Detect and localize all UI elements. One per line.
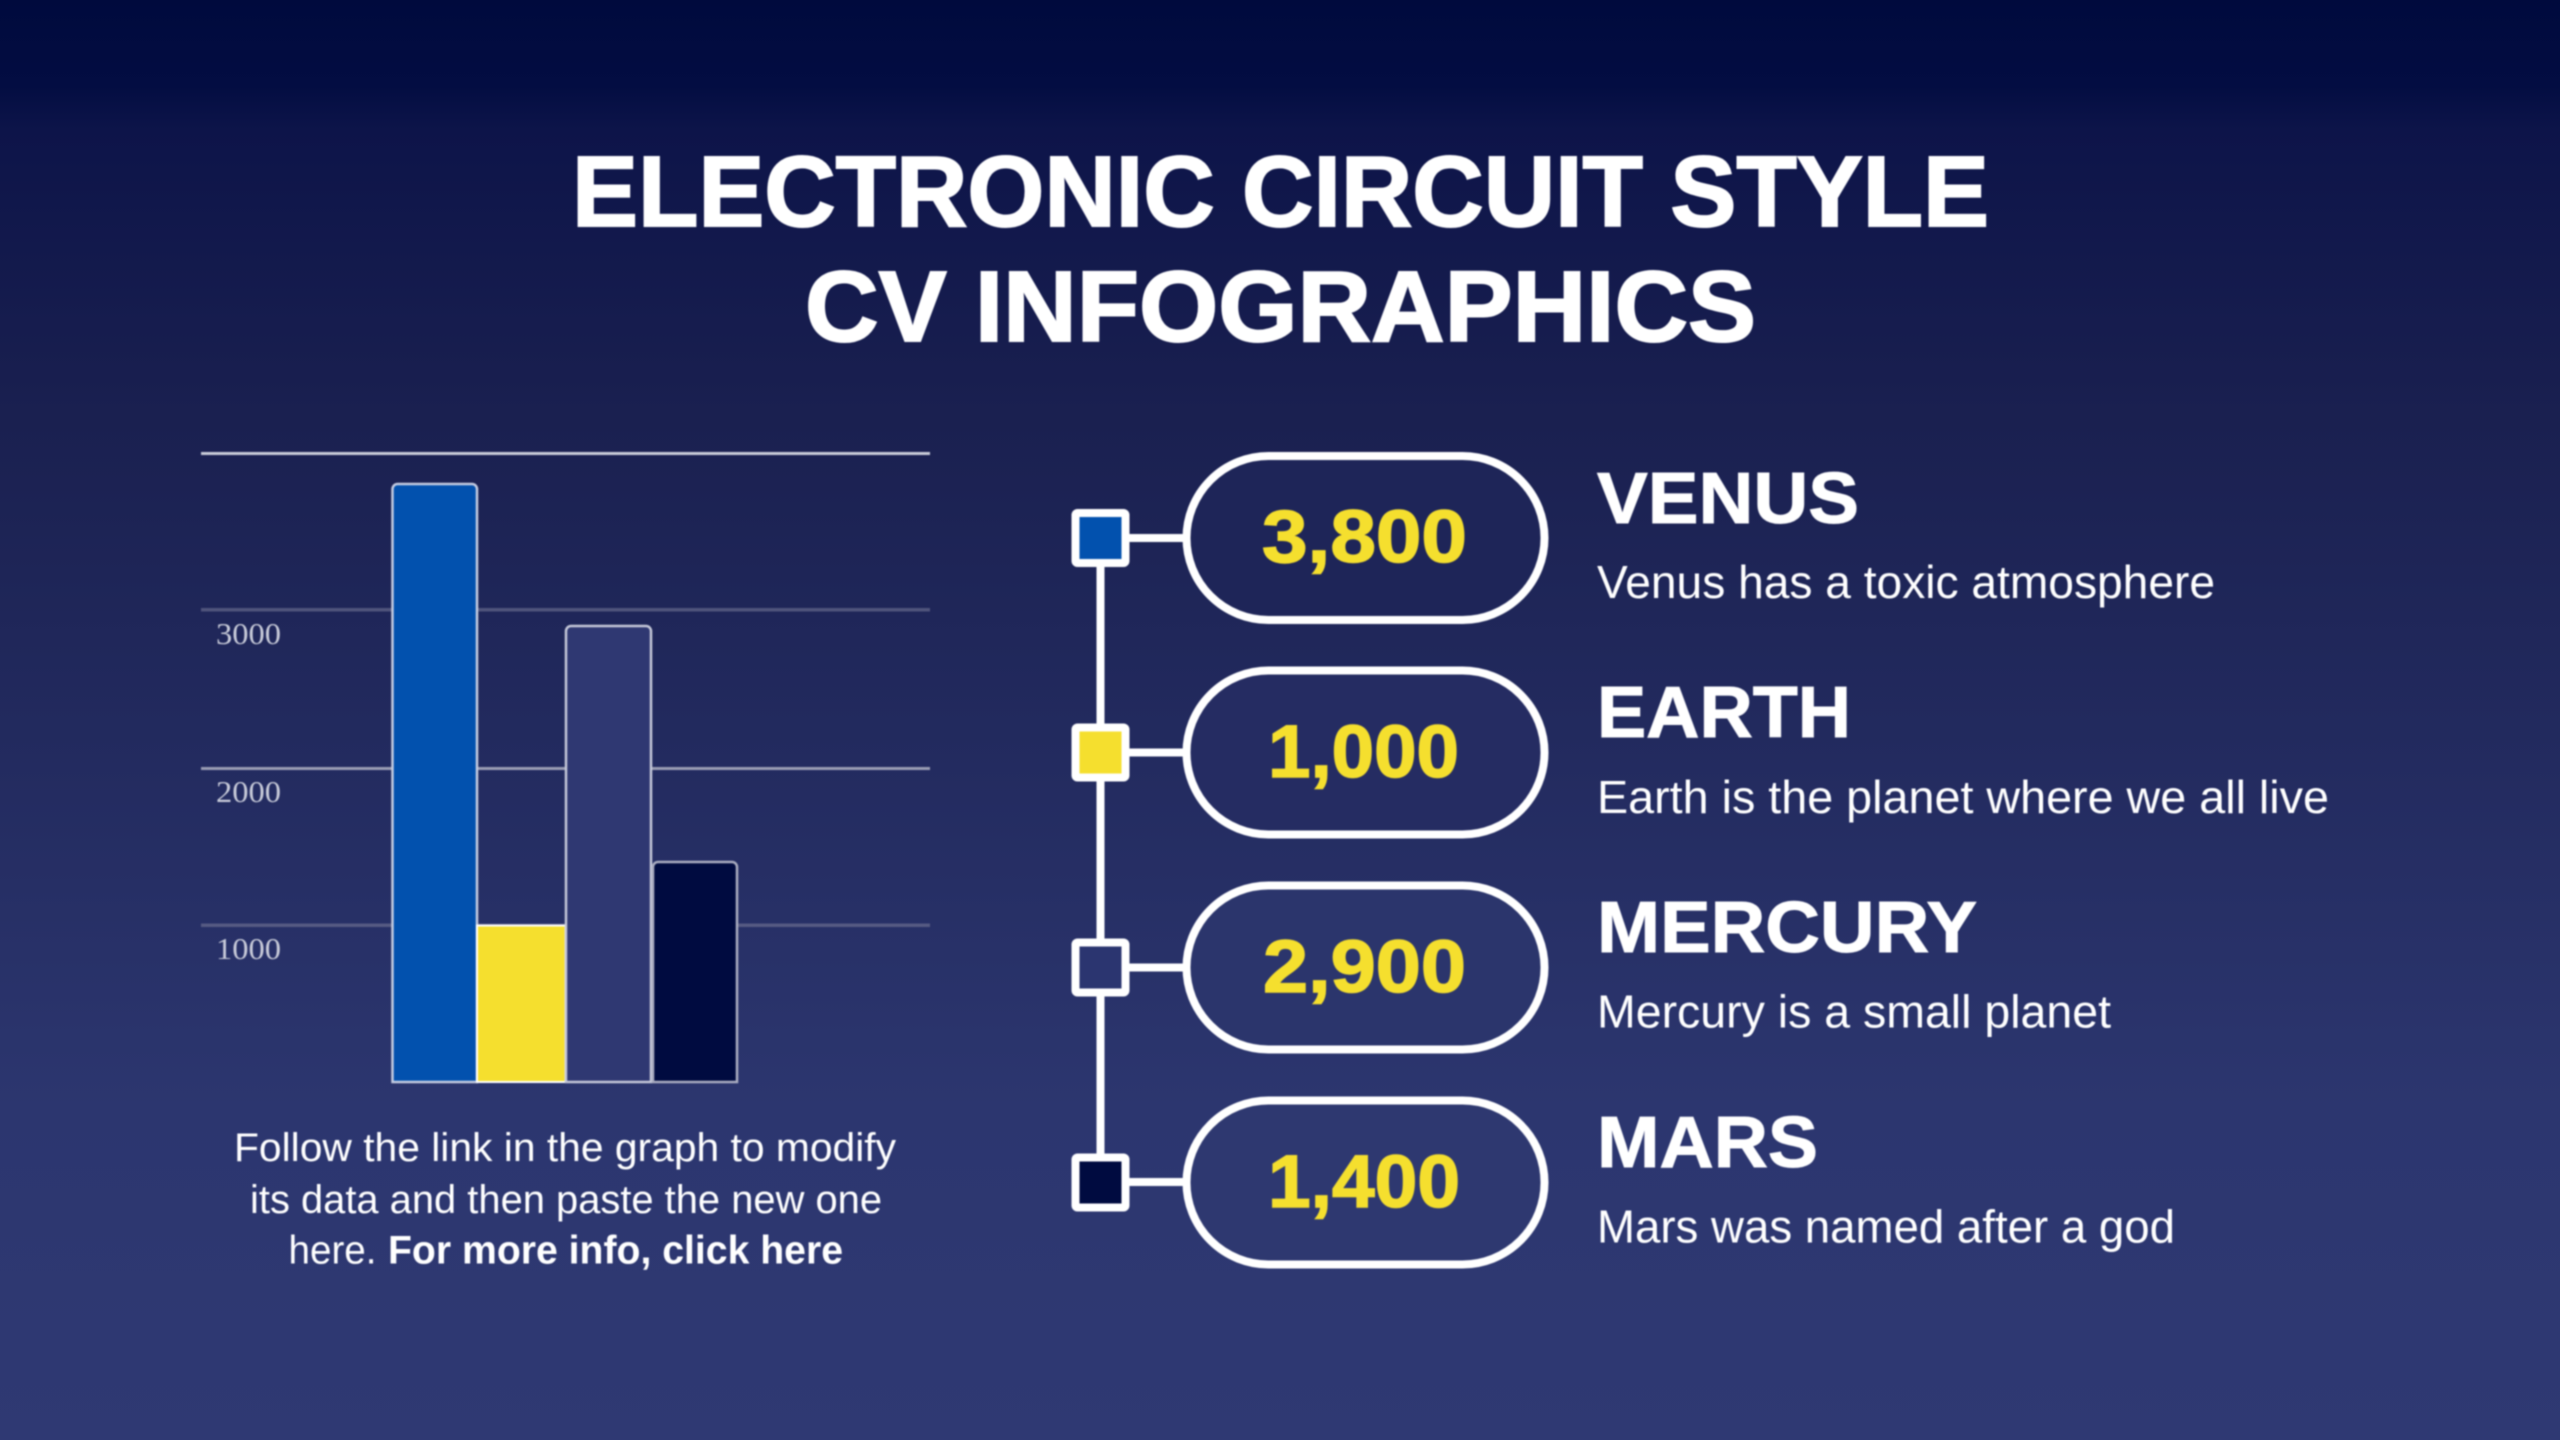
bar: Mars 1400 <box>653 862 737 1082</box>
chart caption: Follow the link in the graph to modify <box>234 1126 896 1170</box>
value pill <box>1186 456 1544 620</box>
heading: EARTH <box>1597 673 1851 753</box>
y axis labels: 3000 <box>216 616 281 651</box>
bar: Venus 3800 <box>392 484 477 1082</box>
item: Mercury <box>1076 886 2111 1050</box>
chart caption: here. <box>288 1228 376 1272</box>
description: Venus has a toxic atmosphere <box>1597 556 2215 608</box>
chart gridlines <box>201 452 930 927</box>
infographic content <box>201 136 2329 1272</box>
title: CV INFOGRAPHICS <box>805 251 1756 363</box>
bar chart <box>201 452 930 1082</box>
item: Venus <box>1076 456 2215 620</box>
value: 1,400 <box>1268 1140 1460 1223</box>
chart caption: For more info, click here <box>388 1228 843 1272</box>
title: ELECTRONIC CIRCUIT STYLE <box>572 136 1989 248</box>
node square: navy <box>1076 1158 1126 1208</box>
heading: VENUS <box>1597 459 1859 539</box>
value: 2,900 <box>1263 925 1466 1008</box>
node square: yellow <box>1076 728 1126 778</box>
value pill <box>1186 1100 1544 1264</box>
node square: blue <box>1076 513 1126 563</box>
value: 3,800 <box>1262 495 1467 578</box>
description: Mercury is a small planet <box>1597 986 2111 1038</box>
y axis labels <box>216 616 281 966</box>
value: 1,000 <box>1268 710 1459 793</box>
description: Earth is the planet where we all live <box>1597 771 2329 823</box>
value pill <box>1186 670 1544 834</box>
title <box>572 136 1989 363</box>
heading: MARS <box>1597 1103 1818 1183</box>
y axis labels: 2000 <box>216 774 281 809</box>
circuit connector lines <box>1096 534 1187 1186</box>
item: Earth <box>1076 670 2329 834</box>
y axis labels: 1000 <box>216 931 281 966</box>
chart caption <box>234 1126 896 1272</box>
heading: MERCURY <box>1597 888 1977 968</box>
chart caption: its data and then paste the new one <box>250 1178 882 1222</box>
node square: indigo <box>1076 942 1126 992</box>
item: Mars <box>1076 1100 2175 1264</box>
description: Mars was named after a god <box>1597 1200 2175 1252</box>
value pill <box>1186 886 1544 1050</box>
bar: Mercury 2900 <box>566 626 651 1082</box>
bar: Earth 1000 <box>477 926 566 1082</box>
